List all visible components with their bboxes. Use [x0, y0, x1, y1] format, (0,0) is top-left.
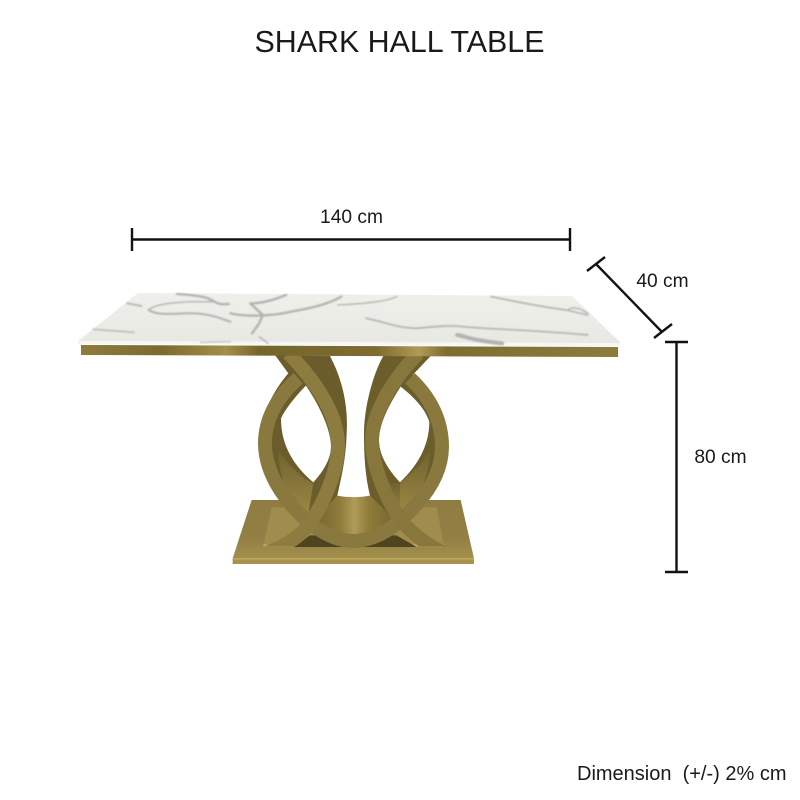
marble top — [78, 293, 620, 346]
depth dimension: 40 cm: 40 cm — [636, 271, 689, 292]
crossing band left — [260, 353, 338, 555]
table illustration — [78, 293, 620, 564]
base plate — [233, 500, 474, 564]
tabletop apron — [81, 345, 618, 357]
table base and legs — [233, 353, 474, 564]
rear right lobe — [364, 355, 448, 523]
height dimension: 80 cm: 80 cm — [694, 447, 747, 468]
depth dimension: 40 cm — [587, 257, 689, 338]
marble veins — [93, 294, 588, 343]
width dimension: 140 cm: 140 cm — [320, 207, 383, 228]
crossing bands clipped at the base — [260, 353, 450, 555]
central bowl — [307, 496, 402, 535]
title: SHARK HALL TABLE — [255, 25, 544, 59]
rear left lobe — [260, 355, 347, 523]
marble lip — [78, 341, 620, 346]
crossing band right — [372, 353, 450, 555]
outer ring with bottom arc — [265, 378, 442, 541]
dimension tolerance note: Dimension (+/-) 2% cm — [577, 763, 786, 785]
lit inner walls — [278, 450, 430, 520]
